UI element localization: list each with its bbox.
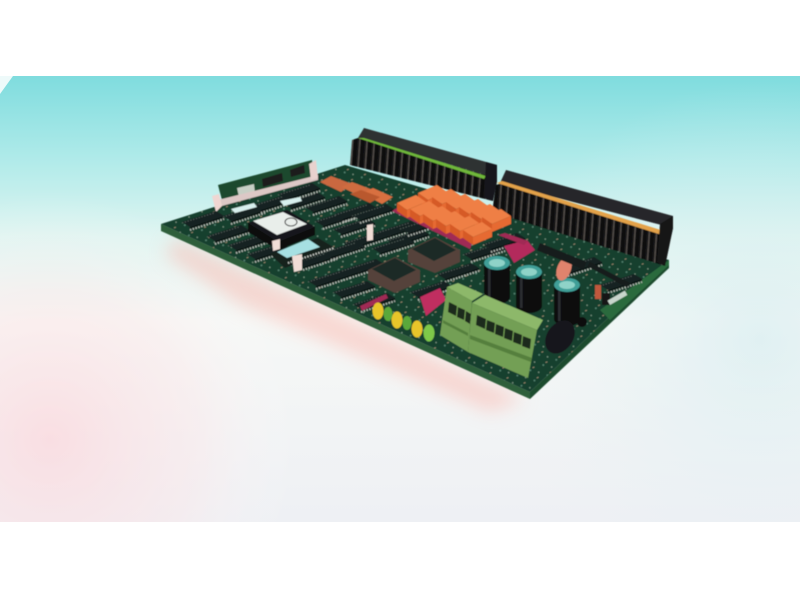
PLCC chip left [368, 257, 420, 293]
LEDs [372, 302, 434, 342]
terminal block right [468, 295, 543, 378]
board assembly [161, 128, 673, 399]
integrated circuit chips [182, 183, 642, 312]
right edge connector with orange stripe [492, 170, 673, 266]
magenta component [360, 233, 535, 316]
salmon disc capacitor [553, 255, 575, 283]
circuit board [161, 165, 669, 399]
inductor [539, 315, 581, 359]
capacitors [484, 256, 580, 326]
board reflection shadow [165, 238, 525, 412]
chip with blue label [270, 238, 335, 268]
small components right area [537, 243, 630, 327]
potted black module with white label [248, 210, 315, 250]
terminal block left [440, 283, 483, 352]
left edge connector with green stripe [350, 128, 497, 201]
magenta bar below relays [392, 208, 473, 249]
small orange relays row [320, 176, 393, 204]
PLCC chip right [408, 237, 460, 273]
white clips [272, 224, 373, 272]
memory module [212, 160, 318, 212]
orange relay block [397, 185, 511, 245]
photo background [0, 76, 800, 522]
white labels on chips [231, 197, 302, 213]
